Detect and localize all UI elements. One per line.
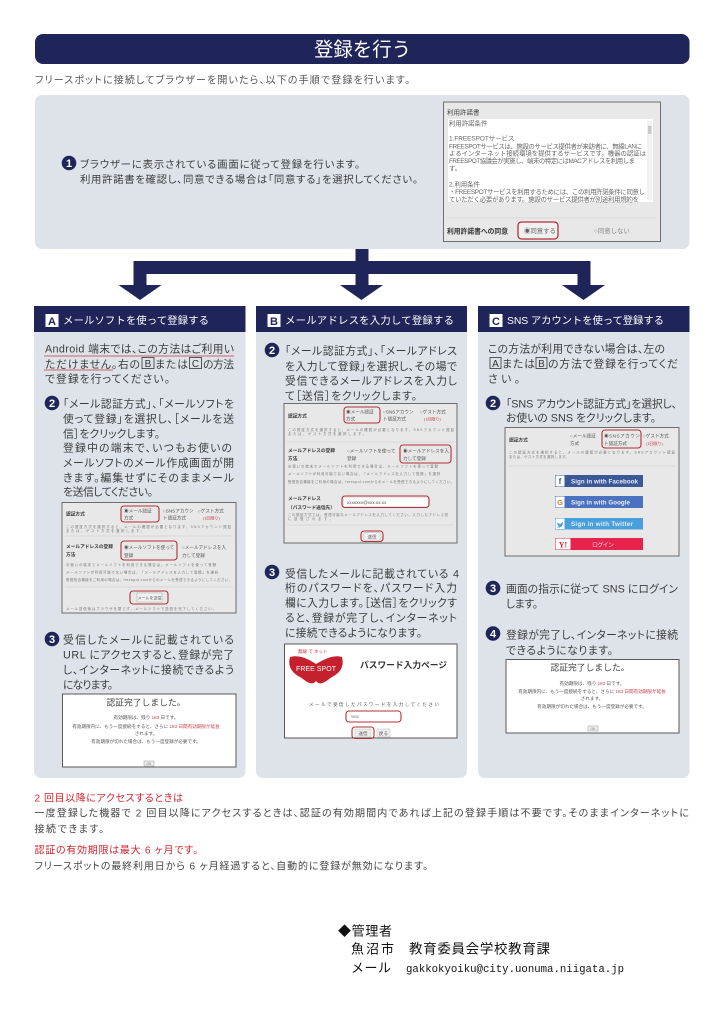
panel: method A — [34, 306, 246, 778]
icon: step number 2 — [265, 343, 279, 357]
note: validity period: 認証の有効期限は最大 6 ヶ月です。 — [34, 844, 198, 856]
icon: step number 4 — [486, 626, 500, 641]
step 2 text — [63, 396, 234, 498]
button: Google: G — [557, 498, 563, 507]
contact: administrator: 教育委員会学校教育課 — [409, 942, 550, 956]
screenshot: mail software form: 力して登録 — [182, 552, 205, 559]
screenshot: terms of use: よるインターネット接続環境を提供するサービスです。機器の認証は — [449, 148, 647, 158]
contact: administrator — [338, 924, 624, 976]
screenshot: mail address form: xxxxxxx@xxx.xx.xx — [347, 500, 387, 505]
screenshot: terms of use: 利用許諾書 — [447, 108, 480, 116]
screenshot: mail address form: ○メールソフトを使って — [347, 448, 396, 454]
screenshot: mail address form: メールアドレス — [288, 496, 321, 502]
step 3 text: URL にアクセスすると、登録が完了 — [63, 648, 234, 662]
notice text: の方法で登録を行ってくだ — [548, 356, 678, 370]
header: method A: メールソフトを使って登録する — [63, 314, 209, 327]
button: Facebook: Sign in with Facebook — [571, 478, 639, 486]
step 2 text: を送信してください。 — [63, 484, 153, 498]
step 1 text: ブラウザーに表示されている画面に従って登録を行います。 — [80, 158, 360, 171]
panel: method C — [478, 306, 690, 778]
panel: step 1 — [35, 95, 690, 249]
screenshot: mail address form: メールアドレスの登録 — [288, 447, 335, 454]
notice text — [488, 342, 678, 386]
step 4 text: 登録が完了し、インターネットに接続 — [506, 628, 678, 642]
screenshot: mail software form: ト認証方式 — [163, 514, 186, 522]
note: validity period: フリースポットの最終利用日から 6 ヶ月経過すると、自動的に登録が無効になります。 — [34, 860, 428, 872]
notice text: この方法が利用できない場合は、左の — [488, 342, 665, 356]
step 2 text: 「メール認証方式」、「メールアドレス — [285, 344, 457, 358]
header: method C: C — [492, 316, 500, 328]
step 3 text: し、インターネットに接続できるよう — [63, 662, 234, 676]
screenshot: mail address form: (1回限り) — [424, 416, 442, 422]
screenshot: authentication complete — [62, 694, 236, 767]
screenshot: terms of use: ・FREESPOTサービスを利用するためには、この利用許諾条件に同意し — [449, 187, 645, 196]
screenshot: SNS login form: ○ゲスト方式 — [643, 432, 669, 440]
screenshot: authentication complete: 認証完了しました。 — [550, 662, 630, 672]
step 3 text: 欄に入力します。［送信］をクリックす — [285, 596, 458, 610]
screenshot: mail address form: ト認証方式 — [383, 416, 406, 422]
screenshot: mail address form: 方法 — [288, 455, 298, 462]
screenshot: mail address form: 力して登録 — [403, 455, 426, 462]
notice text with underline: で登録を行ってください。 — [45, 372, 170, 386]
screenshot: mail software form: (1回限り) — [203, 514, 221, 520]
header: method B: B — [270, 316, 278, 328]
notice text with underline: または — [155, 358, 188, 371]
logo: FREE SPOT — [289, 648, 343, 683]
screenshot: authentication complete: 有効期限は、残り 183 日です。 — [114, 714, 178, 721]
notice text: B — [538, 359, 545, 370]
screenshot: authentication complete: OK — [591, 727, 596, 731]
screenshot: mail address form: 方式 — [346, 416, 356, 422]
screenshot: mail address form: この認証方式を選択すると、メールの確認が必要となります。SNSアカウント認証 — [288, 427, 455, 432]
notice text: さい。 — [488, 372, 520, 386]
button: Yahoo — [555, 538, 643, 550]
screenshot: mail software form: メールを送信 — [138, 594, 162, 600]
button: Google — [555, 496, 643, 508]
screenshot: mail software form: メールソフトが利用可能でない場合は、「メールアドレスを入力して登録」を選択 — [66, 570, 219, 574]
step 3 text — [506, 582, 678, 610]
screenshot: SNS login form — [505, 428, 679, 556]
screenshot: mail software form: ○SNSアカウン — [163, 508, 194, 514]
screenshot: terms of use: ○同意しない — [594, 226, 630, 235]
button: Facebook: f — [559, 477, 562, 486]
screenshot: mail software form: または、ゲスト方式を選択します。 — [66, 528, 144, 533]
screenshot: mail address form: 登録 — [347, 455, 357, 462]
screenshot: authentication complete: 有効期限は、残り 183 日です。 — [560, 680, 624, 687]
icon: step number 3: 3 — [269, 567, 275, 579]
step 3 text — [285, 566, 459, 640]
note: second access: 2 回目以降にアクセスするときは — [34, 792, 183, 804]
step 2 text: メールソフトのメール作成画面が開 — [63, 456, 234, 470]
screenshot: mail software form: 受信拒否機能をご利用の場合は、freespot.comからのメールを受信できるようにしてください。 — [66, 577, 232, 582]
screenshot: password input page: 送信 — [358, 730, 368, 737]
icon: step number 2: 2 — [490, 398, 496, 410]
step 2 text: 受信できるメールアドレスを入力し — [285, 374, 457, 388]
icon: step number 1 — [62, 156, 76, 170]
header: method A — [34, 306, 246, 332]
step 3 text: になります。 — [63, 678, 113, 692]
header: method C — [478, 306, 690, 332]
notice text with underline: の方法 — [203, 357, 234, 371]
screenshot: mail address form: メールソフトが利用可能でない場合は、「メールアドレスを入力して登録」を選択 — [288, 471, 441, 476]
step 3 text: ると、登録が完了し、インターネット — [285, 610, 457, 624]
step 2 text: 登録中の端末で、いつもお使いの — [63, 440, 232, 454]
screenshot: mail address form: （パスワード送信先） — [288, 504, 335, 511]
screenshot: terms of use: 利用許諾書への同意 — [447, 226, 508, 236]
screenshot: mail address form: 送信 — [367, 534, 377, 540]
button: Yahoo: ログイン — [592, 541, 614, 549]
icon: step number 1: 1 — [66, 158, 72, 170]
screenshot: mail software form: ◉メールソフトを使って — [124, 544, 175, 551]
screenshot: mail software form: メール送信後はブラウザを閉じず、メールソフトで送信を完了してください。 — [66, 606, 216, 611]
note: second access — [34, 792, 689, 836]
screenshot: mail address form: 認証方式 — [288, 412, 307, 420]
screenshot: authentication complete: 有効期限が切れた場合は、もう一度登録が必要です。 — [537, 703, 647, 710]
step 3 text: 受信したメールに記載されている — [63, 632, 234, 646]
step 2 text: を入力して登録」を選択し、その場で — [285, 359, 458, 373]
screenshot: mail address form: お使いの端末でメールソフトを利用できる場合は、メールソフトを使って登録 — [288, 464, 439, 468]
screenshot: mail software form: ○メールアドレスを入 — [182, 544, 227, 551]
step 3 text: 画面の指示に従って SNS にログイン — [506, 582, 678, 596]
icon: step number 3 — [265, 565, 279, 579]
header: method C: SNS アカウントを使って登録する — [507, 314, 664, 327]
icon: step number 2 — [45, 396, 59, 410]
step 3 text: します。 — [506, 598, 538, 610]
screenshot: mail address form: ○ゲスト方式 — [420, 408, 446, 416]
step 1 text — [80, 158, 418, 186]
icon: step number 2 — [486, 396, 500, 410]
screenshot: terms of use: 1.FREESPOTサービス — [449, 134, 514, 142]
screenshot: password input page: 0808 — [351, 715, 359, 719]
button: Facebook — [555, 475, 643, 487]
screenshot: mail software form — [62, 502, 236, 613]
button: Google: Sign in with Google — [571, 500, 631, 506]
screenshot: mail software form: 認証方式 — [66, 510, 85, 518]
screenshot: password input page: メールで受信したパスワードを入力してください — [309, 701, 439, 708]
notice text with underline — [44, 342, 234, 386]
screenshot: mail software form: この認証方式を選択すると、メールの確認が必要となります。SNSアカウント認証 — [66, 524, 232, 529]
icon: step number 2: 2 — [269, 345, 275, 357]
screenshot: authentication complete: 有効期限内に、もう一度接続をすると、さらに 183 日間有効期限が延長 — [518, 688, 666, 695]
screenshot: mail software form: 方式 — [124, 514, 134, 522]
step 3 text: 桁のパスワードを、パスワード入力 — [285, 582, 457, 594]
header: method B: メールアドレスを入力して登録する — [285, 314, 454, 327]
screenshot: SNS login form: ト認証方式 — [604, 440, 627, 447]
step 3 text: 受信したメールに記載されている 4 — [285, 566, 459, 580]
screenshot: mail software form: メールアドレスの登録 — [66, 543, 113, 550]
note: second access: 一度登録した機器で 2 回目以降にアクセスするときは、認証の有効期間内であれば上記の登録手順は不要です。そのままインターネットに — [34, 806, 689, 820]
screenshot: password input page: 戻る — [379, 731, 388, 737]
screenshot: SNS login form: 認証方式 — [509, 436, 528, 444]
screenshot: SNS login form: ◉SNSアカウン — [604, 432, 640, 440]
screenshot: mail software form: お使いの端末でメールソフトを利用できる場合は、メールソフトを使って登録 — [66, 562, 217, 567]
screenshot: terms of use — [444, 102, 660, 242]
screenshot: authentication complete: OK — [147, 762, 152, 766]
screenshot: authentication complete: されます。 — [581, 695, 603, 702]
contact: administrator: 魚沼市 — [351, 942, 394, 956]
screenshot: terms of use: ていただく必要があります。施設のサービス提供者が別途利用規約を — [449, 194, 639, 204]
step 3 text: に接続できるようになります。 — [285, 626, 422, 640]
screenshot: mail address form: または、ゲスト方式を選択します。 — [288, 431, 366, 436]
panel: method B — [256, 306, 467, 778]
header: method A: A — [48, 316, 56, 328]
logo: FREE SPOT: 無線 で ネット — [298, 648, 328, 655]
screenshot: password input page: パスワード入力ページ — [360, 659, 447, 670]
screenshot: authentication complete: 認証完了しました。 — [106, 698, 186, 708]
screenshot: terms of use: 2.利用条件 — [449, 180, 481, 188]
logo: FREE SPOT: FREE SPOT — [296, 666, 337, 673]
screenshot: SNS login form: または、ゲスト方式を選択します。 — [509, 454, 569, 459]
screenshot: terms of use: 利用許諾条件 — [449, 118, 488, 128]
notice text with underline: B — [145, 359, 152, 370]
step 4 text: できるようになります。 — [506, 644, 613, 657]
step 1 text: 利用許諾書を確認し、同意できる場合は「同意する」を選択してください。 — [80, 173, 418, 186]
screenshot: mail software form: 方法 — [66, 551, 76, 558]
screenshot: SNS login form: ○メール認証 — [570, 434, 596, 440]
step 2 text: 「SNS アカウント認証方式」を選択し、 — [506, 396, 677, 410]
step 3 text — [63, 632, 234, 692]
icon: step number 2: 2 — [49, 398, 55, 410]
screenshot: terms of use: ◉同意する — [524, 226, 556, 235]
screenshot: SNS login form: (1回限り) — [646, 440, 664, 446]
screenshot: password input page — [284, 644, 457, 738]
screenshot: terms of use: FREESPOT協議会が実施し、端末の特定にはMACアドレスを利用しま — [449, 156, 635, 165]
note: second access: 接続できます。 — [34, 822, 104, 836]
icon: step number 3: 3 — [49, 634, 55, 646]
intro text: フリースポットに接続してブラウザーを開いたら、以下の手順で登録を行います。 — [35, 74, 410, 86]
screenshot: mail address form: 受信拒否機能をご利用の場合は、freespot.comからのメールを受信できるようにしてください。 — [288, 479, 454, 484]
step 4 text — [506, 628, 678, 657]
screenshot: SNS login form: 方式 — [570, 440, 580, 447]
step 2 text: て［送信］をクリックします。 — [285, 388, 417, 402]
step 2 text: 「メール認証方式」、「メールソフトを — [63, 396, 234, 410]
notice text with underline: C — [192, 359, 199, 370]
notice text: または — [502, 358, 535, 370]
icon: step number 3 — [486, 581, 500, 595]
button: Twitter — [555, 518, 643, 530]
notice text with underline: ただけません。右の — [45, 357, 140, 371]
screenshot: authentication complete: 有効期限内に、もう一度接続をすると、さらに 183 日間有効期限が延長 — [72, 723, 220, 730]
icon: step number 4: 4 — [490, 628, 497, 640]
screenshot: mail address form: ◉メール認証 — [346, 408, 374, 416]
screenshot: mail address form: に送信されます。 — [288, 516, 333, 521]
header: method B — [256, 306, 467, 332]
screenshot: terms of use: す。 — [449, 164, 461, 172]
title bar: 登録を行う — [314, 39, 411, 61]
screenshot: mail software form: ○ゲスト方式 — [198, 508, 224, 514]
screenshot: terms of use: FREESPOTサービスは、施設のサービス提供者が来訪者に、無線LANに — [449, 142, 642, 150]
step 2 text: お使いの SNS をクリックします。 — [506, 412, 656, 424]
screenshot: mail address form: ◉メールアドレスを入 — [403, 448, 449, 454]
screenshot: mail address form — [284, 404, 457, 543]
icon: step number 3: 3 — [490, 583, 496, 595]
notice text: A — [492, 359, 499, 370]
step 2 text: きます。編集せずにそのままメール — [63, 470, 234, 484]
screenshot: authentication complete: 有効期限が切れた場合は、もう一度登録が必要です。 — [91, 738, 201, 745]
screenshot: mail software form: ◉メール認証 — [124, 508, 152, 514]
screenshot: authentication complete — [506, 660, 679, 733]
icon: step number 3 — [45, 632, 59, 646]
title bar — [35, 34, 690, 64]
screenshot: mail address form: ○SNSアカウン — [383, 408, 414, 416]
button: Twitter: Sign in with Twitter — [571, 521, 634, 528]
screenshot: authentication complete: されます。 — [135, 730, 157, 737]
arrows: branching to three methods — [118, 249, 605, 300]
step 2 text: 使って登録」を選択し、［メールを送 — [63, 412, 234, 426]
contact: administrator: gakkokyoiku@city.uonuma.niigata.jp — [406, 964, 624, 976]
screenshot: mail software form: 登録 — [124, 552, 134, 559]
step 2 text — [285, 344, 458, 402]
step 2 text — [506, 396, 677, 424]
step 2 text: 信］をクリックします。 — [63, 426, 160, 440]
contact: administrator: メール — [351, 960, 391, 976]
button: Yahoo: Y! — [559, 540, 567, 550]
note: validity period — [34, 844, 428, 872]
notice text with underline: Android 端末では、この方法はご利用い — [45, 342, 234, 356]
contact: administrator: ◆管理者 — [338, 924, 392, 938]
screenshot: SNS login form: この認証方式を選択すると、メールの確認が必要となります。SNSアカウント認証 — [509, 450, 676, 454]
screenshot: mail address form: この認証方式では、受信可能なメールアドレスを入力してください。入力したアドレス宛 — [288, 512, 449, 517]
